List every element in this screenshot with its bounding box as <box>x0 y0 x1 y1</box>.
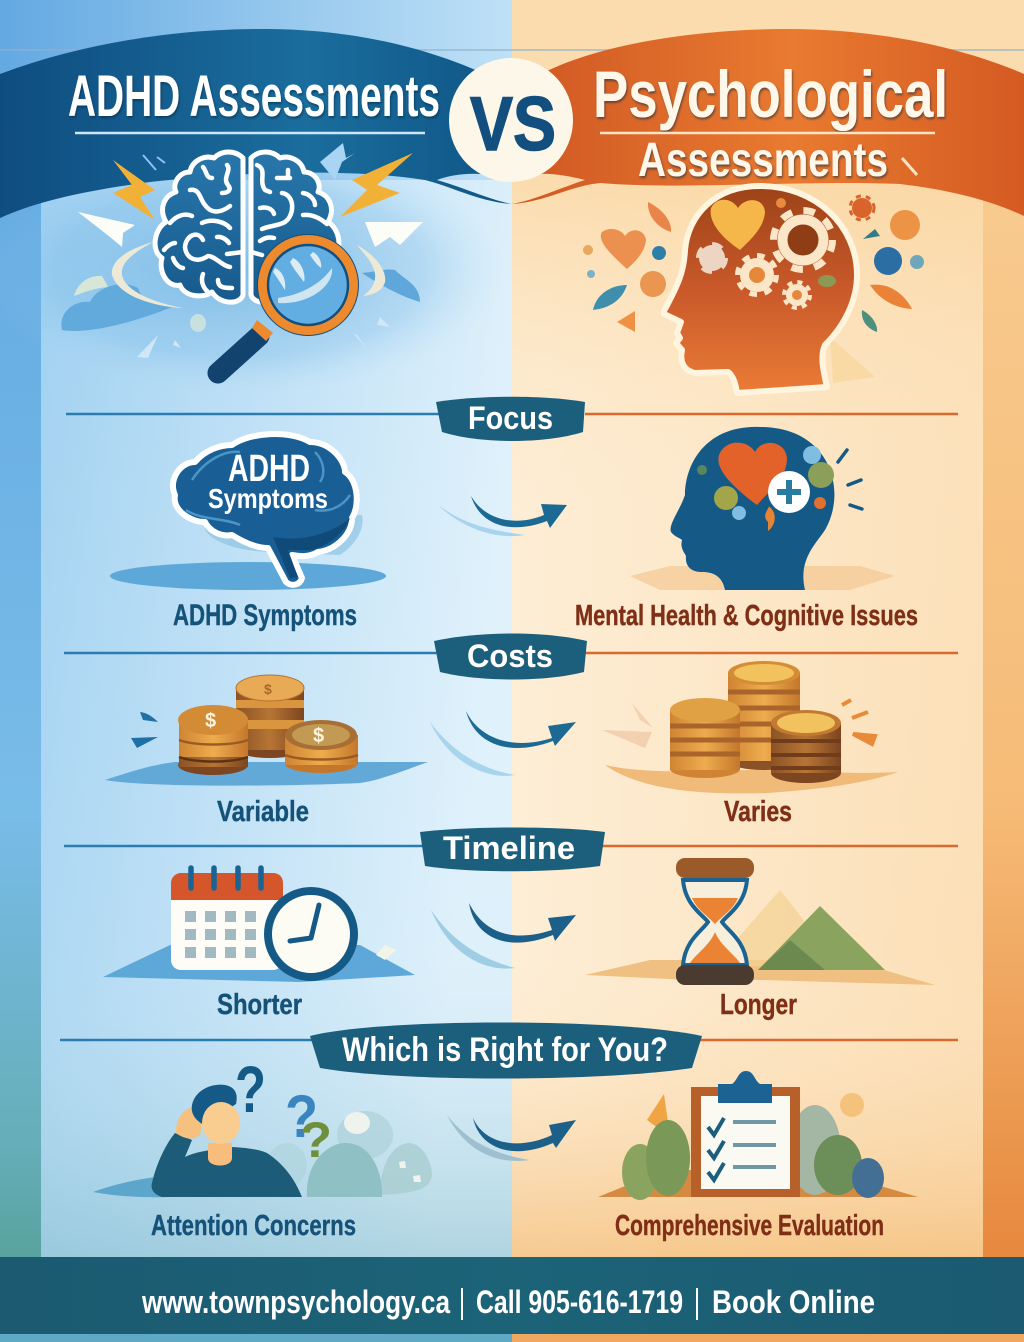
footer: phone: Call 905-616-1719 <box>476 1284 683 1320</box>
back coin stack: $ <box>264 681 272 697</box>
icon: brain with magnifier <box>61 143 423 373</box>
panel: person with question marks: ? <box>285 1083 318 1150</box>
front-right coin stack: $ <box>313 725 324 747</box>
heading ribbon: Which is Right for You?: Which is Right for You? <box>342 1031 668 1069</box>
heading ribbon: Which is Right for You? <box>310 1022 702 1078</box>
text: Attention Concerns: Attention Concerns <box>151 1210 356 1242</box>
heading ribbon: Focus <box>436 397 585 441</box>
icon: head with heart and gears <box>583 186 924 393</box>
title: ADHD Assessments: ADHD Assessments <box>68 64 440 129</box>
panel: calendar and clock <box>103 868 415 982</box>
heading ribbon: Costs <box>434 634 587 680</box>
VS badge: VS <box>470 82 556 167</box>
heading ribbon: Timeline: Timeline <box>443 830 575 866</box>
question marks: ? <box>235 1052 266 1126</box>
panel: person with question marks <box>93 1052 432 1197</box>
heading ribbon: Timeline <box>420 828 605 871</box>
title: Psychological: Psychological <box>593 57 948 131</box>
VS badge <box>449 58 573 182</box>
panel: person with question marks: ? <box>300 1112 332 1168</box>
panel: left coins <box>105 675 428 786</box>
background: orange right side <box>512 0 1024 1342</box>
background: blue left side <box>0 0 512 1342</box>
text: Comprehensive Evaluation: Comprehensive Evaluation <box>615 1210 884 1242</box>
footer: website: www.townpsychology.ca <box>141 1284 450 1320</box>
front-left coin stack <box>178 705 248 775</box>
front-left coin stack: $ <box>205 710 216 732</box>
text: Varies: Varies <box>724 796 792 828</box>
title: Assessments: Assessments <box>638 134 888 187</box>
panel: right coins <box>602 661 898 793</box>
divider lines <box>60 414 958 1040</box>
panel: focus ADHD symptoms brain <box>110 434 386 590</box>
arrow: choice <box>447 1115 576 1161</box>
text: Mental Health & Cognitive Issues: Mental Health & Cognitive Issues <box>575 600 918 632</box>
label inside brain: ADHD <box>228 448 310 490</box>
left coin stack <box>670 698 740 778</box>
footer bar <box>0 1257 1024 1334</box>
back coin stack <box>236 675 304 758</box>
heading ribbon: Focus: Focus <box>468 400 553 436</box>
heading ribbon: Costs: Costs <box>467 638 553 674</box>
text: Shorter: Shorter <box>217 989 302 1021</box>
middle coin stack <box>728 661 800 770</box>
front-right coin stack <box>285 720 358 773</box>
panel: clipboard checklist <box>598 1071 918 1200</box>
magnifier <box>218 336 259 373</box>
text: Variable: Variable <box>217 796 309 828</box>
footer: book online: Book Online <box>712 1284 875 1320</box>
left title banner <box>0 29 512 218</box>
arrow: costs <box>430 711 576 776</box>
brain hemispheres <box>155 152 243 302</box>
right title banner <box>512 29 1024 216</box>
panel: hourglass and mountains <box>585 858 935 985</box>
panel: focus ADHD symptoms brain: Symptoms <box>208 483 328 514</box>
panel: focus mental health head <box>630 427 895 590</box>
right coin stack <box>771 710 841 783</box>
text: ADHD Symptoms: ADHD Symptoms <box>173 599 357 632</box>
text: Longer: Longer <box>720 989 797 1021</box>
arrow: timeline <box>431 903 576 969</box>
arrow: focus <box>438 496 567 536</box>
